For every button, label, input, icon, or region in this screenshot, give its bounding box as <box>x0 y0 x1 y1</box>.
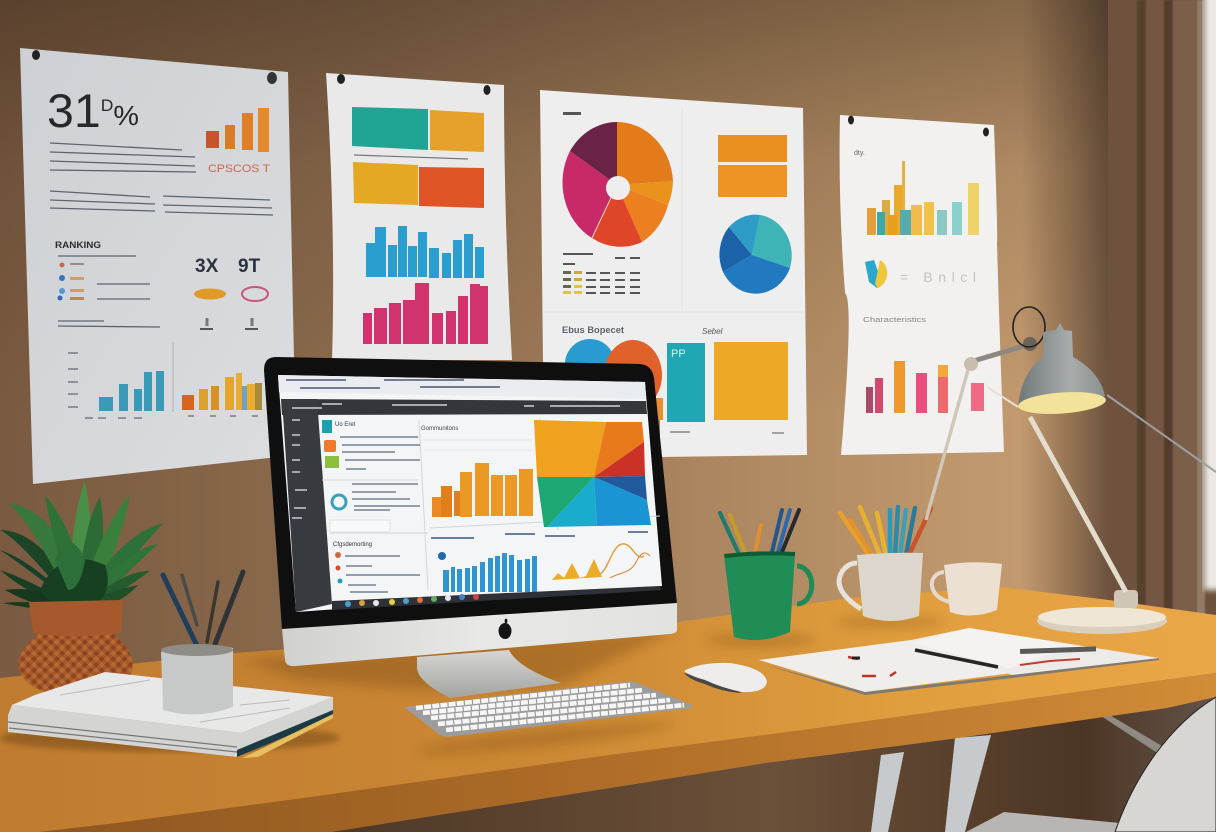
desk lamp <box>926 307 1216 634</box>
partly hidden circles <box>565 339 615 389</box>
poster 3: pie charts: Sebel <box>702 327 723 336</box>
red scribbles <box>848 657 896 676</box>
poster 1: statistics sheet: CPSCOS T <box>208 163 270 175</box>
screen: Gommunitons <box>421 426 458 432</box>
pencil cup front over notebooks <box>162 672 233 714</box>
orange blocks <box>718 135 787 162</box>
panel list icons <box>322 420 420 532</box>
shade <box>1018 323 1105 408</box>
area chart on screen <box>552 544 650 580</box>
small white cup <box>932 562 1002 616</box>
panel list icons: Uo Eret <box>335 422 356 428</box>
small pie chart <box>719 215 792 294</box>
notebooks stack <box>0 672 340 758</box>
open notebook on desk <box>759 628 1159 695</box>
poster 4: charts on light sheet: = Bnlcl <box>900 269 976 285</box>
dashboard panel dividers <box>322 418 660 590</box>
desk shadows <box>240 617 945 758</box>
mouse <box>684 663 767 693</box>
plant <box>0 481 163 695</box>
lamp arms <box>1030 417 1126 592</box>
apple logo <box>498 619 512 639</box>
list icons <box>58 262 84 300</box>
poster 4: charts on light sheet <box>840 115 1004 455</box>
under-desk shadow <box>331 697 1216 832</box>
large colour pie tile <box>534 420 651 527</box>
amber card <box>714 342 788 420</box>
terracotta pot <box>18 633 133 695</box>
screen: Cfgsdemorting <box>333 542 372 548</box>
lamp base <box>1037 608 1167 634</box>
poster 3: pie charts: Ebus Bopecet <box>562 325 624 335</box>
headline figure: % <box>113 100 139 131</box>
headline figure: 31 <box>47 84 99 137</box>
orange bars on screen <box>432 463 533 517</box>
yellow bar chart <box>182 373 262 410</box>
poster 3: pie charts: PP <box>671 348 686 360</box>
bezel <box>264 357 677 630</box>
mini bar chart orange <box>206 108 269 152</box>
poster 1: statistics sheet: RANKING <box>55 240 101 250</box>
poster 4: charts on light sheet: Characteristics <box>863 317 927 324</box>
colourful logo mark <box>865 260 887 288</box>
taskbar <box>332 586 662 610</box>
monitor <box>264 357 677 698</box>
multicolour bars <box>867 161 979 235</box>
pencil cup with pens <box>161 572 243 714</box>
pink bars <box>866 361 984 413</box>
blue bar chart <box>99 371 164 411</box>
stand <box>417 650 561 698</box>
teal card <box>667 343 705 422</box>
poster 1: statistics sheet <box>20 48 296 484</box>
poster 2: bars and blocks <box>326 73 512 360</box>
poster 4: charts on light sheet: dty. <box>854 150 865 157</box>
desk legs <box>871 714 1162 832</box>
text lines <box>50 143 273 327</box>
chin <box>282 603 677 666</box>
blue bars <box>366 226 484 278</box>
screen <box>278 375 662 612</box>
legend table <box>563 253 640 294</box>
green mug <box>720 510 812 640</box>
headline figure: D <box>101 96 113 115</box>
blue bars on screen <box>443 553 537 592</box>
lit opening <box>1017 389 1107 417</box>
chair <box>966 697 1216 832</box>
desk <box>0 587 1216 832</box>
white mug with pencils <box>839 507 931 621</box>
poster 1: statistics sheet: 3X <box>195 256 219 277</box>
curtain <box>1108 0 1216 800</box>
poster 3: pie charts <box>540 90 807 457</box>
pink bars <box>363 283 488 344</box>
poster 1: statistics sheet: 9T <box>238 256 261 277</box>
pen <box>915 650 998 667</box>
desk front edge <box>39 673 1216 832</box>
desk top surface <box>0 587 1216 832</box>
large pie chart <box>562 122 673 247</box>
keyboard <box>404 681 692 737</box>
